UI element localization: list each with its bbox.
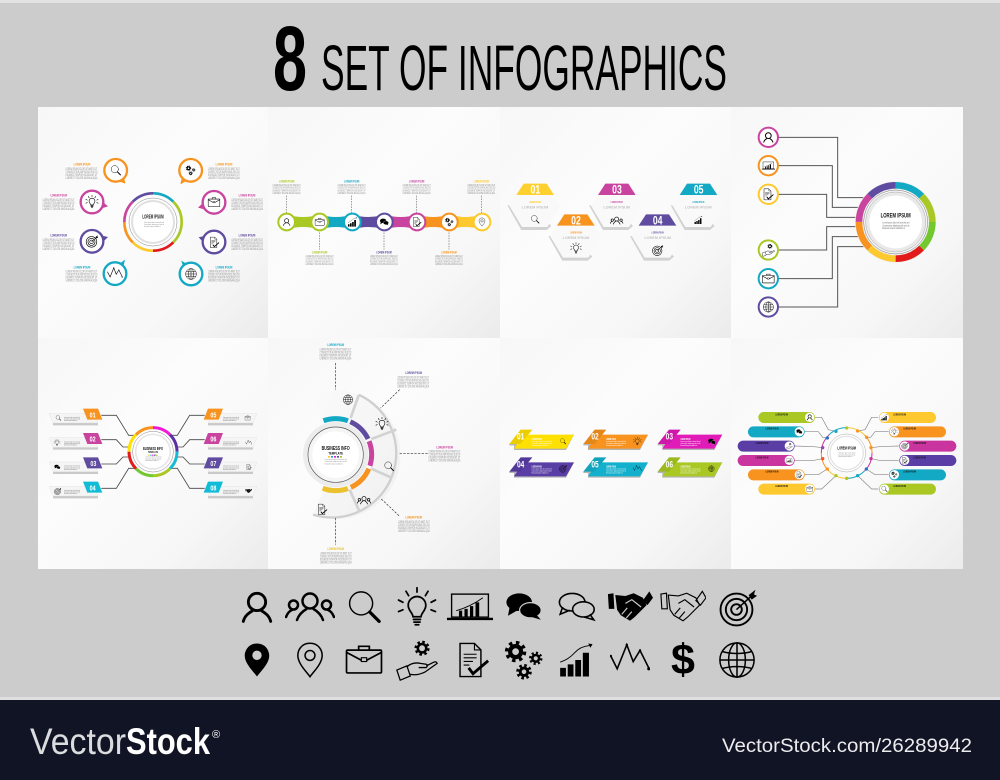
left rows: 01: [90, 410, 96, 419]
ribbon 06: 06: [666, 459, 673, 469]
text blocks panel 6: LOREM IPSUM: [436, 444, 453, 449]
left rows: 02: [90, 435, 96, 444]
ribbon 04: 04: [517, 459, 524, 469]
hexagon 01: LOREM IPSUM: [529, 202, 541, 204]
hexagon 01: [507, 184, 561, 230]
central ring: LOREM IPSUM: [142, 214, 164, 220]
circle nodes with icons: [759, 128, 778, 317]
left pills: LOREM IPSUM: [775, 412, 789, 416]
bottom left panels: [49, 342, 461, 564]
hexagon 01: 01: [530, 184, 541, 197]
hexagon 03: 03: [612, 184, 622, 197]
bubble: document: [199, 231, 225, 253]
footer bar: [0, 700, 1000, 780]
bubble: gears: [179, 159, 202, 184]
text blocks panel 2: LOREM IPSUM: [409, 178, 425, 183]
center circle: TEMPLATE: [328, 451, 344, 455]
connector lines: [778, 137, 864, 307]
text blocks panel 2: [273, 178, 496, 266]
title: 8: [273, 8, 307, 110]
ribbon 06: LOREM IPSUM: [680, 467, 690, 469]
left pills: [738, 412, 815, 495]
bubble: line chart: [104, 260, 126, 285]
icon row 2: [245, 636, 754, 684]
hexagon 04: LOREM IPSUM: [652, 233, 664, 235]
ribbon 02: [583, 430, 648, 450]
connector lines: [101, 415, 205, 488]
right rows: [204, 409, 257, 498]
text blocks panel 1: LOREM IPSUM: [50, 193, 67, 198]
center ring: TEMPLATE: [148, 451, 158, 454]
center circle: [303, 422, 368, 487]
hexagon 04: LOREM IPSUM: [644, 235, 672, 240]
top left panels: [43, 159, 496, 285]
hexagon 03: LOREM IPSUM: [611, 202, 623, 204]
hexagon 02: [548, 214, 602, 261]
center circle with dots: LOREM IPSUM: [837, 445, 856, 450]
panel backgrounds grid: [38, 107, 963, 569]
hexagon 05: [671, 184, 724, 230]
footer logo: ®: [212, 729, 220, 741]
right pills: LOREM IPSUM: [903, 470, 917, 474]
right rows: 08: [210, 483, 216, 492]
right pills: [879, 412, 956, 495]
timeline nodes with icons: [278, 214, 490, 230]
icon row 2: $: [671, 636, 695, 684]
center circle: BUSINESS INFO: [322, 446, 350, 452]
bubble: bulb: [81, 191, 108, 213]
right pills: LOREM IPSUM: [893, 484, 907, 488]
icon set: [243, 588, 757, 684]
text blocks panel 2: LOREM IPSUM: [376, 249, 392, 254]
left rows: 04: [90, 483, 96, 492]
ribbon 01: [509, 430, 574, 450]
left rows: 03: [90, 459, 96, 468]
left pills: LOREM IPSUM: [756, 441, 769, 445]
bubble: briefcase: [198, 191, 225, 214]
footer id: VectorStock.com/26289942: [722, 736, 972, 757]
ribbon 01: 01: [517, 432, 524, 442]
center ring: BUSINESS INFO: [143, 446, 163, 451]
panel 1: central ring with speech bubbles: [43, 159, 263, 285]
text blocks panel 1: LOREM IPSUM: [216, 162, 233, 167]
top right panels: [507, 128, 936, 317]
text blocks panel 1: LOREM IPSUM: [239, 233, 256, 238]
ribbon 02: LOREM IPSUM: [606, 439, 616, 441]
text blocks panel 6: LOREM IPSUM: [327, 546, 344, 551]
text blocks panel 2: LOREM IPSUM: [279, 178, 295, 183]
panel 3: hexagons: [507, 184, 724, 261]
text blocks panel 6: LOREM IPSUM: [405, 515, 422, 520]
text blocks panel 2: LOREM IPSUM: [474, 178, 489, 183]
left pills: LOREM IPSUM: [775, 484, 789, 488]
right pills: LOREM IPSUM: [903, 427, 917, 431]
left pills: LOREM IPSUM: [766, 427, 779, 431]
text blocks panel 2: LOREM IPSUM: [312, 249, 328, 254]
text blocks panel 1: LOREM IPSUM: [216, 264, 233, 269]
text blocks panel 6: LOREM IPSUM: [405, 370, 422, 375]
hexagon 02: 02: [571, 214, 581, 227]
right rows: 05: [210, 410, 216, 419]
left pills: LOREM IPSUM: [756, 455, 769, 459]
title: [273, 8, 727, 110]
icon row 1: [243, 588, 757, 625]
panel 7: ribbons: [509, 430, 722, 478]
text blocks panel 6: LOREM IPSUM: [327, 342, 344, 347]
panel 2: chain timeline: [273, 178, 496, 266]
bottom right panels: [509, 412, 956, 495]
text blocks panel 1: LOREM IPSUM: [74, 264, 91, 269]
text blocks panel 1: LOREM IPSUM: [74, 162, 91, 167]
hexagon 05: 05: [694, 184, 704, 197]
ribbon 05: 05: [591, 459, 599, 469]
bubble: search: [104, 159, 127, 184]
fan icons: [318, 395, 393, 515]
right pills: LOREM IPSUM: [913, 441, 927, 445]
hexagon 04: [630, 214, 683, 261]
left rows: [49, 409, 102, 498]
left pills: LOREM IPSUM: [766, 470, 779, 474]
ribbon 03: 03: [666, 432, 673, 442]
bubble: target: [81, 230, 108, 253]
ribbon 06: [658, 457, 722, 478]
right pills: LOREM IPSUM: [913, 455, 927, 459]
hexagon 05: LOREM IPSUM: [692, 202, 704, 204]
panel 8: pills around circle: [738, 412, 956, 495]
ribbon 01: LOREM IPSUM: [532, 439, 542, 441]
panel 6: half circle fan: [300, 342, 461, 564]
ribbon 05: [583, 457, 648, 478]
hexagon 03: LOREM IPSUM: [603, 204, 631, 209]
right pills: LOREM IPSUM: [893, 412, 907, 416]
hexagon 01: LOREM IPSUM: [522, 204, 549, 209]
colored arcs: [300, 419, 372, 491]
hexagon 03: [589, 184, 642, 230]
text blocks panel 1: [43, 162, 263, 283]
text blocks panel 2: LOREM IPSUM: [441, 249, 457, 254]
center circle with dots: [821, 426, 873, 480]
ribbon 04: LOREM IPSUM: [532, 467, 542, 469]
text blocks panel 6: [320, 342, 461, 564]
right rows: 06: [210, 435, 216, 444]
hexagon 02: LOREM IPSUM: [570, 233, 582, 235]
dashed leaders: [336, 363, 428, 545]
right rows: 07: [210, 459, 216, 468]
bubble: globe: [180, 261, 202, 285]
center ring: [129, 428, 177, 476]
panel 4: connector diagram: [759, 128, 936, 317]
hexagon 02: LOREM IPSUM: [563, 235, 590, 240]
fan segments: [313, 390, 401, 519]
connector lines: [795, 417, 899, 489]
ribbon 05: LOREM IPSUM: [606, 467, 616, 469]
dashed leaders: [287, 196, 481, 250]
central ring: [124, 193, 182, 251]
ribbon 02: 02: [591, 432, 599, 442]
text blocks panel 1: LOREM IPSUM: [50, 233, 67, 238]
panel 5: numbered rows around ring: [49, 409, 257, 498]
footer logo: Stock: [126, 721, 210, 762]
footer logo: [30, 721, 220, 762]
big ring: LOREM IPSUM: [881, 212, 911, 219]
ribbon 03: [658, 430, 722, 450]
hexagon 04: 04: [653, 214, 663, 227]
chain connectors: [287, 215, 482, 229]
text blocks panel 1: LOREM IPSUM: [239, 193, 256, 198]
footer logo: Vector: [30, 721, 126, 762]
text blocks panel 2: LOREM IPSUM: [344, 178, 360, 183]
ribbon 03: LOREM IPSUM: [680, 439, 690, 441]
hexagon 05: LOREM IPSUM: [685, 204, 712, 209]
footer separator: [0, 697, 1000, 700]
big ring: [855, 181, 936, 263]
ribbon 04: [509, 457, 574, 478]
top light strip: [0, 0, 1000, 3]
